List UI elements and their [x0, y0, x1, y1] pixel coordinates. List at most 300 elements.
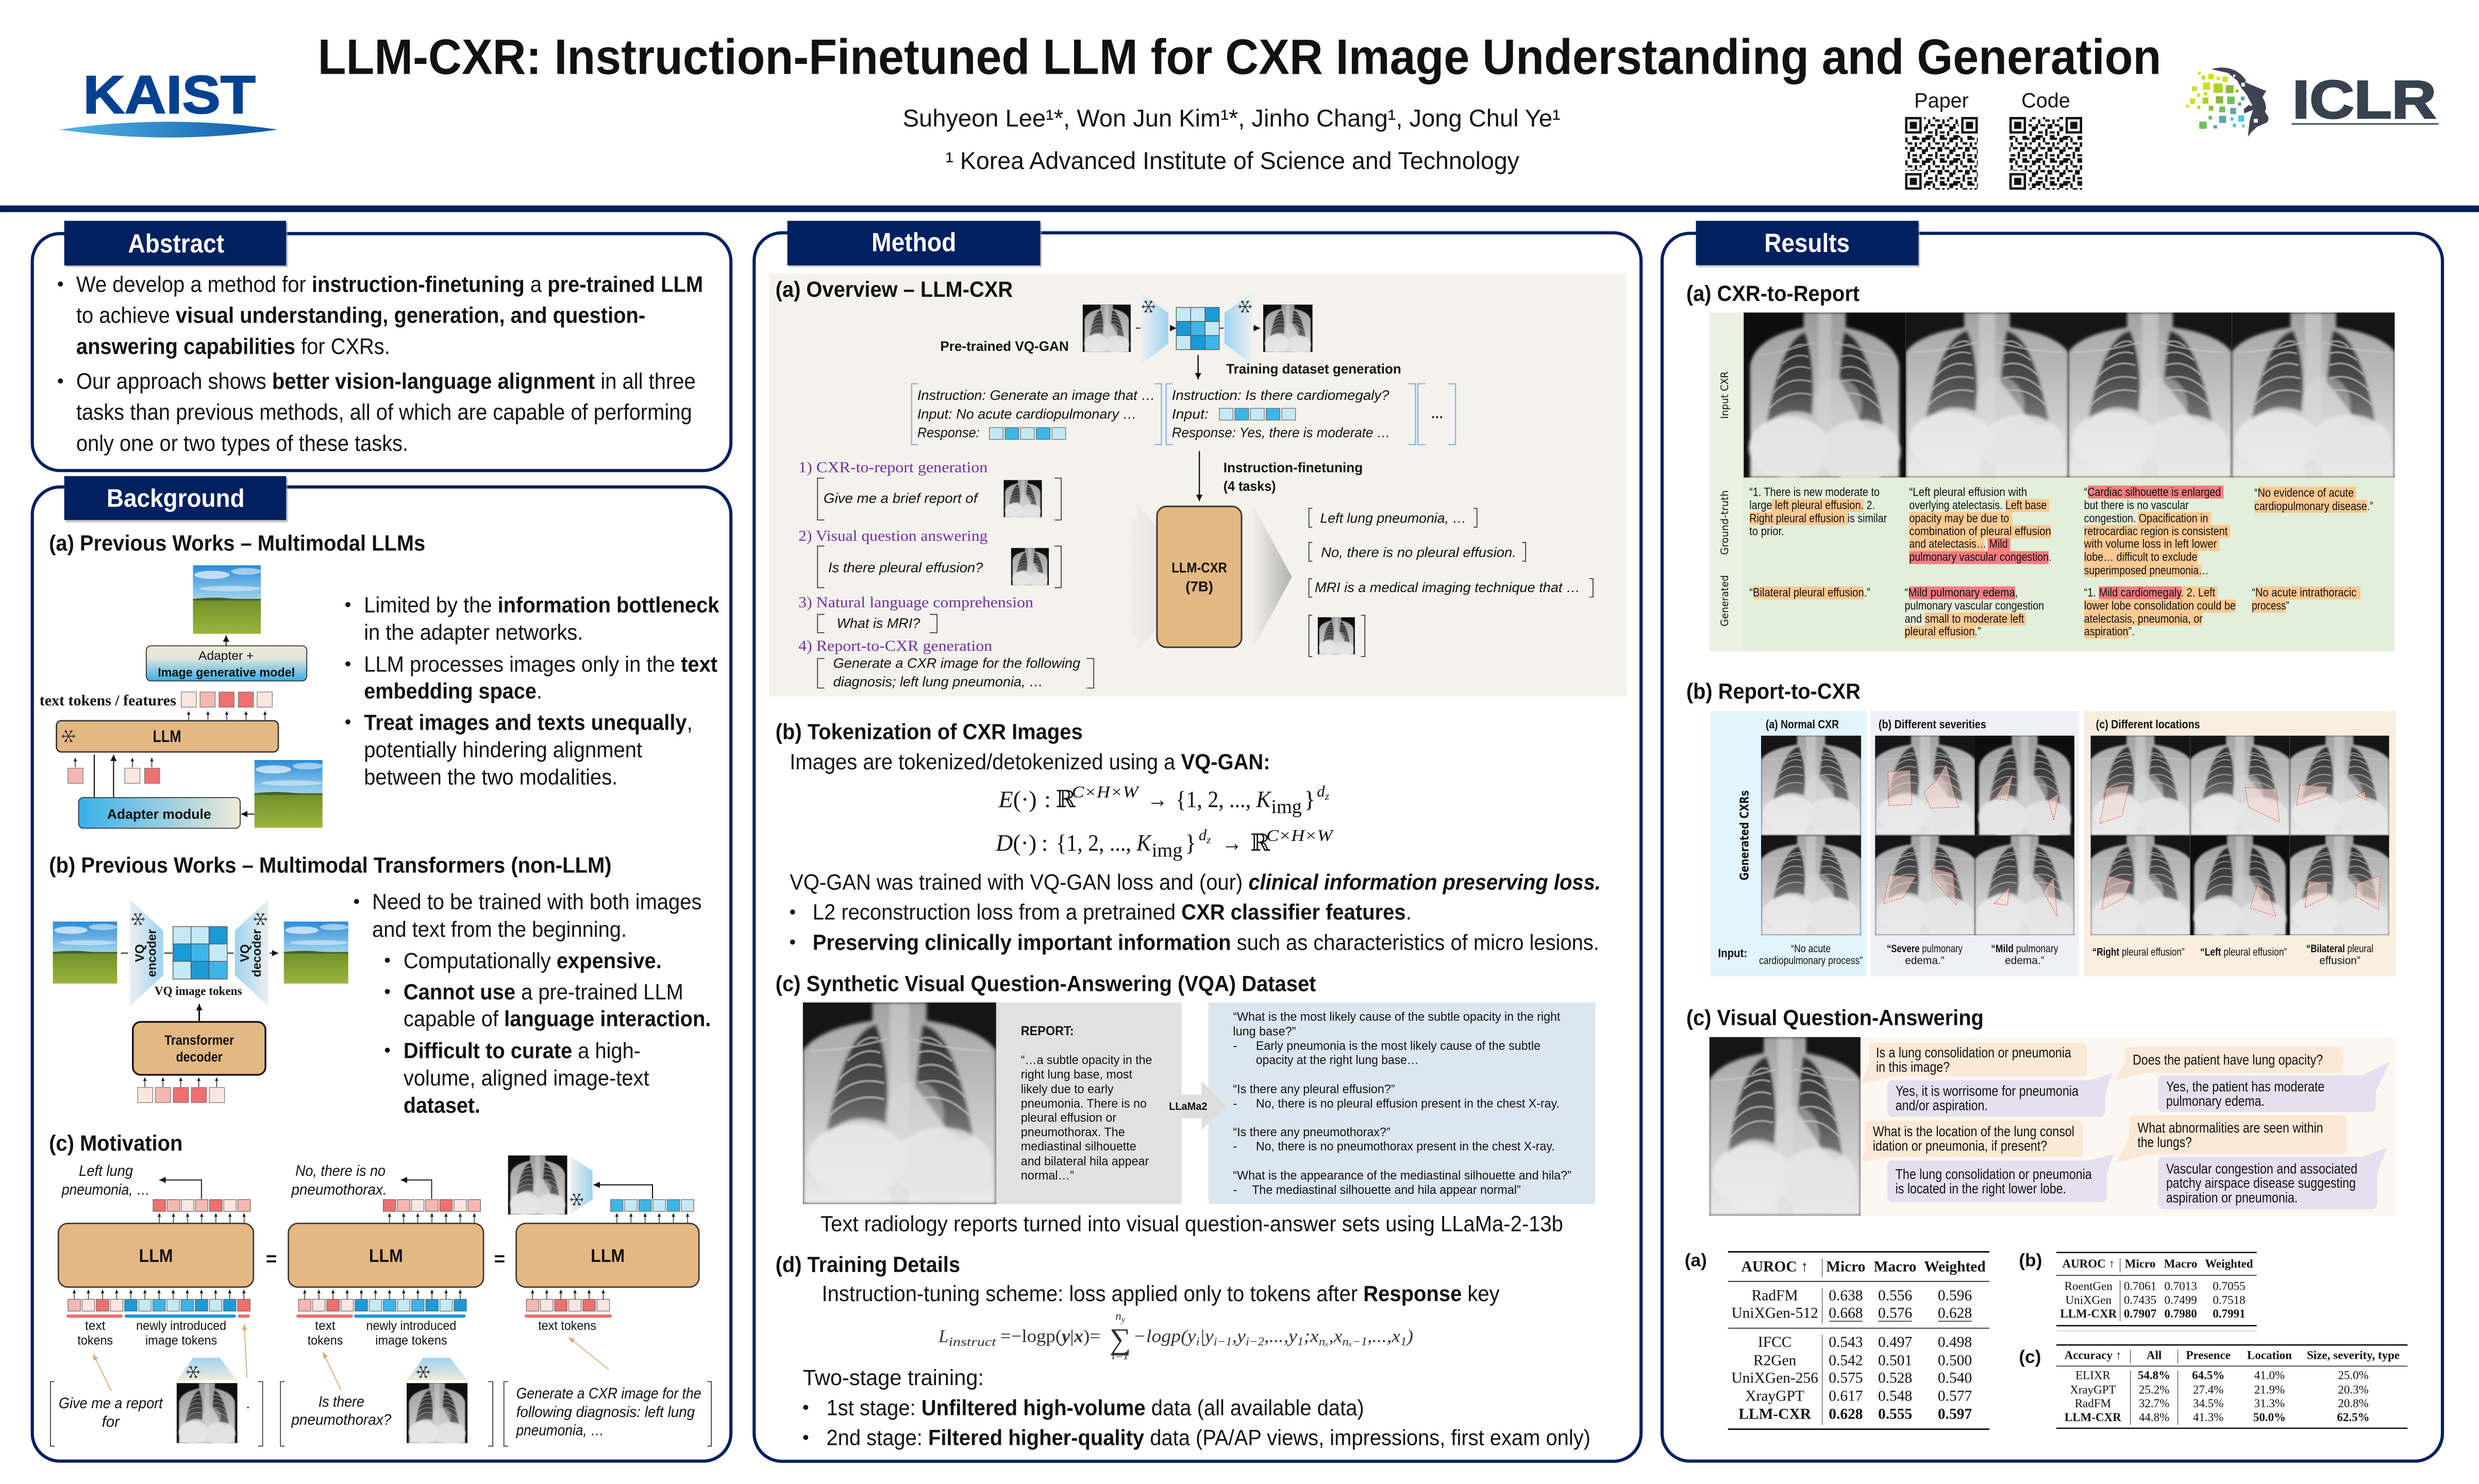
diagram: motivation column 2 [280, 1162, 493, 1446]
table c: 27.4% [2193, 1383, 2223, 1396]
affiliation: ¹ Korea Advanced Institute of Science and Technology [945, 147, 1519, 174]
token grid [1176, 308, 1219, 350]
equation: loss: ,x [1329, 1326, 1343, 1346]
answer 2 [1887, 1154, 2114, 1202]
table a [1685, 1250, 1989, 1429]
equation: loss: −logp( y [1133, 1326, 1195, 1346]
abstract text: only one or two types of these tasks. [76, 431, 408, 456]
equals: = [494, 1249, 505, 1270]
prompt: Give me a report [59, 1395, 163, 1412]
generated reports: “Mild pulmonary edema, [1905, 585, 2018, 599]
table b: Macro [2164, 1257, 2197, 1270]
label: instruction-finetuning [1224, 460, 1363, 494]
table c [2019, 1345, 2407, 1428]
bullets: transformers: Computationally expensive. [404, 949, 662, 973]
task 4: Generate a CXR image for the following [833, 655, 1080, 671]
token labels: tokens [77, 1334, 113, 1348]
adapter plus generative model: Adapter + [198, 649, 254, 663]
ground truth reports: Right pleural effusion is similar [1749, 512, 1887, 525]
table a: AUROC ↑ [1741, 1259, 1808, 1275]
input tokens [298, 1299, 466, 1311]
dataset sample 2 [1166, 384, 1415, 445]
token labels: image tokens [375, 1334, 447, 1348]
VQ encoder: encoder [145, 929, 159, 977]
LLM bar [57, 721, 278, 752]
equation: loss: i−2 [1246, 1335, 1264, 1348]
output text [61, 1162, 150, 1198]
dataset sample 1: Instruction: Generate an image that … [917, 387, 1155, 403]
panel: different severities: (b) Different severities [1879, 718, 1986, 731]
table b: 0.7435 [2124, 1294, 2156, 1307]
answer 3: pulmonary edema. [2166, 1093, 2265, 1109]
ground truth reports: to prior. [1749, 525, 1784, 538]
label: instruction-finetuning: Instruction-finetuning [1224, 460, 1363, 476]
heading: overview: (a) Overview – LLM-CXR [776, 277, 1013, 302]
QA box: “Is there any pneumothorax?” [1233, 1125, 1391, 1139]
text: VQ-GAN: Images are tokenized/detokenized using a VQ-GAN: [790, 750, 1270, 774]
bullets: transformers: dataset. [404, 1093, 480, 1118]
panel: results [1662, 221, 2442, 1461]
heading: results [1696, 221, 1920, 267]
equation: loss: =−logp( y|x)= [1000, 1326, 1100, 1346]
input tokens [138, 1087, 225, 1103]
equation: loss: ,...,x [1367, 1326, 1400, 1346]
table c: 21.9% [2254, 1383, 2285, 1396]
table a: 0.576 [1878, 1305, 1912, 1321]
QA box: Early pneumonia is the most likely cause of the subtle [1256, 1039, 1540, 1053]
text: two-stage training [803, 1365, 1590, 1451]
task 1: Give me a brief report of [824, 491, 979, 506]
equation: loss [938, 1309, 1413, 1362]
table a: 0.542 [1829, 1352, 1863, 1369]
equation: decoder: D(·) [995, 830, 1036, 856]
equation: encoder: d [1317, 783, 1325, 800]
task 4 [798, 638, 1094, 689]
heading: method: Method [872, 227, 956, 257]
ground truth reports: large left pleural effusion. 2. [1749, 498, 1875, 512]
logo: ICLR: ICLR [2292, 70, 2436, 130]
question 1: in this image? [1876, 1059, 1950, 1075]
table b: AUROC ↑ [2062, 1257, 2115, 1270]
token labels: image tokens [145, 1334, 217, 1348]
prompt [280, 1358, 493, 1446]
report box: pneumonia. There is no [1021, 1097, 1147, 1110]
table c: 20.8% [2338, 1397, 2369, 1410]
table b: UniXGen [2066, 1294, 2112, 1307]
equation: encoder: z [1325, 790, 1330, 802]
output 2: No, there is no pleural effusion. [1321, 545, 1516, 560]
ground truth reports: overlying atelectasis. Left base [1909, 498, 2047, 512]
bullets: transformers: Cannot use a pre-trained LLM [404, 980, 683, 1005]
table a: (a) [1685, 1250, 1707, 1270]
prompt: Generate a CXR image for the [516, 1385, 701, 1402]
panel: normal CXR: Input: [1718, 947, 1747, 960]
question 4: What abnormalities are seen within [2137, 1120, 2323, 1136]
panel: different severities: “Severe pulmonary [1887, 943, 1963, 955]
panel: different locations: “Bilateral pleural [2306, 943, 2373, 955]
VQ token grid [173, 926, 227, 979]
figure: CXR-to-report [1710, 312, 2394, 651]
question 4 [2116, 1115, 2347, 1162]
adapter module [79, 798, 240, 828]
bullets: transformers: capable of language interaction. [404, 1007, 711, 1032]
answer 1 [1887, 1073, 2112, 1117]
QA box: lung base?” [1233, 1025, 1296, 1039]
prompt: Is there [319, 1393, 364, 1410]
panel: method [754, 221, 1641, 1461]
table a: 0.596 [1938, 1287, 1972, 1304]
table a: UniXGen-512 [1731, 1305, 1818, 1321]
ground truth reports: superimposed pneumonia… [2084, 563, 2208, 577]
token labels: newly introduced [136, 1319, 226, 1333]
LLM box [516, 1223, 699, 1287]
heading: previous works transformers: (b) Previous Works – Multimodal Transformers (non-LLM) [49, 853, 612, 878]
equation: decoder: d [1199, 826, 1207, 844]
VQ decoder [235, 899, 269, 1006]
text: VQ-GAN details: L2 reconstruction loss from a pretrained CXR classifier features. [813, 900, 1412, 925]
generated reports: lower lobe consolidation could be [2084, 599, 2236, 612]
QA box: - [1233, 1039, 1237, 1053]
answer 1: and/or aspiration. [1896, 1098, 1988, 1114]
ground truth reports: combination of pleural effusion [1909, 525, 2051, 538]
abstract text: to achieve visual understanding, generation, and question- [76, 303, 645, 328]
text: VQ-GAN details: VQ-GAN was trained with VQ-GAN loss and (our) clinical information preserving loss. [790, 870, 1601, 895]
table b: 0.7907 [2124, 1307, 2156, 1320]
report box: and bilateral hila appear [1021, 1154, 1149, 1168]
answer 2: The lung consolidation or pneumonia [1896, 1166, 2092, 1182]
equation: loss: |y [1199, 1326, 1214, 1346]
label: VQ image tokens: VQ image tokens [155, 984, 242, 998]
generated reports: “Bilateral pleural effusion.” [1749, 585, 1870, 599]
dataset sample 2: Input: [1172, 406, 1209, 421]
QA box: No, there is no pleural effusion present in the chest X-ray. [1256, 1097, 1560, 1110]
abstract text: We develop a method for instruction-finetuning a pre-trained LLM [76, 272, 703, 297]
QA box: No, there is no pneumothorax present in the chest X-ray. [1256, 1140, 1555, 1154]
bullets: transformers: volume, aligned image-text [404, 1066, 649, 1090]
QR code: paper [1905, 89, 1978, 190]
ground truth reports: and atelectasis… Mild [1909, 537, 2008, 550]
generated reports: atelectasis, pneumonia, or [2084, 612, 2203, 625]
prompt: pneumonia, … [516, 1422, 604, 1439]
table a: 0.638 [1829, 1287, 1863, 1304]
table b: Micro [2125, 1257, 2155, 1270]
generated reports: process” [2252, 599, 2289, 612]
report box: REPORT: [1021, 1024, 1074, 1038]
equation: loss: nₓ [1319, 1335, 1329, 1348]
generated reports: and small to moderate left [1905, 612, 2024, 625]
table a: 0.668 [1829, 1305, 1863, 1321]
VQ encoder [130, 899, 163, 1006]
answer 2: is located in the right lower lobe. [1896, 1181, 2066, 1196]
text: instruction tuning: Instruction-tuning scheme: loss applied only to tokens after Response key [822, 1281, 1500, 1306]
heading: CXR-to-report: (a) CXR-to-Report [1686, 281, 1860, 306]
dataset sample 3: … [1431, 407, 1444, 421]
table c: All [2147, 1348, 2162, 1361]
table a: 0.540 [1938, 1370, 1972, 1386]
panel: different severities [1871, 711, 2079, 976]
heading: motivation: (c) Motivation [49, 1131, 182, 1156]
input tokens [526, 1299, 610, 1311]
abstract text: tasks than previous methods, all of which are capable of performing [76, 400, 692, 425]
dataset sample 1 [912, 384, 1161, 445]
panel: normal CXR: “No acute [1791, 943, 1831, 955]
equation: encoder: C×H×W [1072, 783, 1140, 801]
table a: 0.498 [1938, 1334, 1972, 1351]
report box: “…a subtle opacity in the [1021, 1053, 1152, 1067]
task 4: diagnosis; left lung pneumonia, … [833, 674, 1043, 689]
table c: 44.8% [2139, 1411, 2169, 1424]
equation: encoder: {1, 2, ..., K [1176, 786, 1272, 813]
row labels: Input CXR [1719, 372, 1731, 419]
QA box: “What is the most likely cause of the subtle opacity in the right [1233, 1010, 1561, 1024]
QA box: “What is the appearance of the mediastinal silhouette and hila?” [1233, 1169, 1571, 1183]
box: LLM-CXR: (7B) [1185, 578, 1213, 594]
report box: pleural effusion or [1021, 1111, 1116, 1125]
table c: LLM-CXR [2065, 1411, 2121, 1424]
output tokens [153, 1200, 250, 1211]
prompt: following diagnosis: left lung [516, 1404, 695, 1421]
panel: different locations: (c) Different locations [2096, 718, 2200, 731]
panel: different locations: “Right pleural effusion” [2092, 946, 2185, 958]
QA box: - [1233, 1183, 1237, 1197]
transformer decoder [133, 1022, 265, 1075]
panel: different locations [2084, 711, 2397, 976]
equation: loss: i=1 [1112, 1349, 1129, 1362]
heading: results: Results [1764, 228, 1850, 258]
transformer decoder: Transformer [164, 1033, 234, 1048]
table a: R2Gen [1753, 1352, 1797, 1369]
ground truth reports [1749, 485, 2373, 577]
ground truth reports: cardiopulmonary disease.” [2254, 499, 2373, 513]
heading: abstract: Abstract [128, 229, 224, 258]
dataset sample 1: Response: [917, 425, 980, 440]
LLM box [58, 1223, 254, 1287]
bullets: previous LLMs: Treat images and texts unequally, [364, 710, 693, 735]
panel: different severities: edema.” [1905, 955, 1945, 967]
decoder [1225, 293, 1252, 364]
equation: encoder: img [1271, 796, 1302, 818]
table b: 0.7980 [2164, 1307, 2197, 1320]
answer 4: aspiration or pneumonia. [2166, 1189, 2298, 1205]
panel: normal CXR: Generated CXRs [1738, 790, 1752, 881]
heading: synthetic VQA: (c) Synthetic Visual Question-Answering (VQA) Dataset [776, 971, 1316, 996]
bullets: transformers: Need to be trained with both images [372, 890, 701, 915]
question 2: idation or pneumonia, if present? [1873, 1138, 2047, 1154]
panel: normal CXR: (a) Normal CXR [1766, 718, 1839, 731]
report box: likely due to early [1021, 1082, 1114, 1096]
QA box: The mediastinal silhouette and hila appear normal” [1252, 1183, 1521, 1197]
table c: 32.7% [2139, 1397, 2169, 1410]
image: output field [193, 565, 261, 634]
dataset sample 1: Input: No acute cardiopulmonary … [917, 406, 1137, 421]
table a: 0.597 [1938, 1406, 1972, 1422]
table a: 0.500 [1938, 1352, 1972, 1369]
equation: encoder: } [1304, 786, 1315, 813]
table c: ELIXR [2075, 1369, 2110, 1382]
table a: 0.548 [1878, 1388, 1912, 1404]
heading: method [788, 221, 1042, 267]
table b [2019, 1250, 2257, 1331]
table b: Weighted [2205, 1257, 2253, 1270]
figure: VQA [1710, 1037, 2397, 1216]
label: text tokens: text tokens / features [40, 693, 176, 709]
adapter plus generative model [146, 646, 307, 681]
ground truth reports: but there is no vascular [2084, 498, 2189, 512]
equation: loss: ,y [1232, 1326, 1246, 1346]
image: VQA CXR [1710, 1037, 1861, 1216]
title: LLM-CXR: Instruction-Finetuned LLM for CXR Image Understanding and Generation [318, 30, 2161, 85]
task 4: 4) Report-to-CXR generation [798, 638, 993, 654]
logo: KAIST: KAIST [83, 65, 256, 125]
panel: different severities: “Mild pulmonary [1991, 943, 2058, 955]
row labels: Generated [1719, 575, 1731, 627]
output text [291, 1162, 387, 1198]
task 1: 1) CXR-to-report generation [798, 460, 988, 476]
bullets: previous LLMs: between the two modalities. [364, 765, 617, 789]
table c: 64.5% [2192, 1369, 2224, 1382]
equation: loss: 1 [1297, 1335, 1303, 1348]
equation: loss: nₓ−1 [1343, 1335, 1367, 1348]
table c: Accuracy ↑ [2065, 1348, 2121, 1361]
table a: Micro [1826, 1259, 1866, 1275]
logo: ICLR [2186, 68, 2439, 137]
bullets: transformers [354, 890, 711, 1118]
table a: 0.628 [1938, 1305, 1972, 1321]
table c: 62.5% [2337, 1411, 2370, 1424]
image: field out [284, 921, 348, 984]
box: LLM-CXR: LLM-CXR [1171, 560, 1227, 576]
QR code: paper: Paper [1914, 89, 1969, 112]
equation: encoder: → [1147, 786, 1168, 813]
table a: 0.577 [1938, 1388, 1972, 1404]
text: two-stage training: 1st stage: Unfiltered high-volume data (all available data) [826, 1395, 1364, 1420]
equation: decoder: → [1221, 830, 1242, 856]
table a: IFCC [1758, 1334, 1791, 1351]
task 2: Is there pleural effusion? [828, 560, 983, 575]
table c: 25.2% [2139, 1383, 2169, 1396]
output tokens [611, 1200, 694, 1211]
table c: XrayGPT [2070, 1383, 2116, 1396]
equation: encoder: E(·) [998, 786, 1037, 813]
QA box [1209, 1002, 1595, 1204]
token labels: tokens [308, 1334, 343, 1348]
panel: normal CXR [1711, 711, 1866, 976]
panel: different locations: “Left pleural effusion” [2200, 946, 2287, 958]
question 3 [2114, 1047, 2343, 1081]
ground truth reports: with volume loss in left lower [2084, 537, 2217, 550]
text: VQ-GAN details: Preserving clinically important information such as characteristics of micro lesions. [813, 930, 1599, 955]
row labels [1719, 372, 1731, 627]
QR code: code [2009, 89, 2082, 190]
image: field in [53, 921, 117, 984]
output 4 [1309, 615, 1365, 656]
output text: Left lung [79, 1162, 133, 1179]
token labels [77, 1319, 226, 1348]
generated reports [1749, 585, 2356, 638]
image: CXR in [1083, 305, 1131, 353]
table c: 41.3% [2193, 1411, 2223, 1424]
QA box: - [1233, 1097, 1237, 1110]
output 3: MRI is a medical imaging technique that … [1315, 580, 1580, 595]
question 4: the lungs? [2137, 1134, 2192, 1150]
equation: loss: instruct [949, 1335, 997, 1349]
table c: RadFM [2075, 1397, 2111, 1410]
equation: decoder: : [1042, 830, 1048, 856]
abstract text: answering capabilities for CXRs. [76, 334, 390, 359]
equation: loss: ;x [1303, 1326, 1319, 1346]
input tokens [68, 768, 160, 783]
dataset sample 3 [1418, 384, 1455, 445]
encoder [1142, 293, 1168, 364]
LLM box: LLM [139, 1246, 173, 1266]
LLM bar: LLM [153, 727, 181, 746]
LLM box: LLM [369, 1246, 403, 1266]
table c: 34.5% [2193, 1397, 2223, 1410]
table a: Weighted [1924, 1259, 1986, 1275]
equation: loss: ,...,y [1264, 1326, 1297, 1346]
QA box: - [1233, 1140, 1237, 1154]
table c: 20.3% [2338, 1383, 2369, 1396]
table c: 25.0% [2338, 1369, 2369, 1382]
equation: decoder: z [1206, 834, 1211, 846]
prompt [504, 1381, 711, 1446]
task 2: 2) Visual question answering [798, 528, 988, 545]
answer 4: patchy airspace disease suggesting [2166, 1175, 2356, 1191]
token label: text tokens [538, 1319, 596, 1333]
report box: mediastinal silhouette [1021, 1140, 1136, 1154]
image: generated CXR [508, 1155, 567, 1217]
diagram: motivation column 3 [504, 1155, 711, 1446]
header rule [0, 206, 2479, 212]
equation: loss: L [938, 1326, 949, 1346]
output text: pneumonia, … [61, 1181, 150, 1198]
panel: normal CXR: cardiopulmonary process” [1759, 955, 1863, 967]
task 1 [798, 460, 1061, 520]
question 2: What is the location of the lung consol [1873, 1123, 2074, 1139]
bullets: previous LLMs: Limited by the information bottleneck [364, 593, 719, 618]
diagram: multimodal LLM [40, 565, 323, 828]
table a: 0.575 [1829, 1370, 1863, 1386]
input tokens [68, 1299, 250, 1311]
prompt: . [246, 1395, 250, 1411]
table c: Location [2247, 1348, 2292, 1361]
ground truth reports: “Cardiac silhouette is enlarged [2084, 485, 2221, 498]
arrow: into LLM-CXR [1130, 504, 1201, 651]
VQ encoder: VQ [133, 944, 147, 962]
figure: VQA dataset [803, 1002, 1595, 1204]
table b: 0.7991 [2213, 1307, 2246, 1320]
heading: background [64, 476, 288, 522]
ground truth reports: “No evidence of acute [2254, 486, 2354, 499]
authors: Suhyeon Lee¹*, Won Jun Kim¹*, Jinho Chang¹, Jong Chul Ye¹ [903, 105, 1561, 131]
report box: right lung base, most [1021, 1068, 1132, 1082]
table a: 0.555 [1878, 1406, 1912, 1422]
heading: abstract [64, 221, 288, 267]
table c: Presence [2186, 1348, 2231, 1361]
QR code: code: Code [2021, 89, 2070, 112]
label: dataset generation: Training dataset generation [1226, 361, 1401, 377]
bullets: previous LLMs: in the adapter networks. [364, 620, 583, 645]
answer 3 [2158, 1061, 2390, 1112]
QA box: opacity at the right lung base… [1256, 1053, 1419, 1067]
images: input CXRs [1744, 312, 2394, 482]
table b: (b) [2019, 1250, 2042, 1270]
dataset sample 2: Instruction: Is there cardiomegaly? [1172, 387, 1389, 403]
table c: 31.3% [2254, 1397, 2285, 1410]
table b: LLM-CXR [2060, 1307, 2117, 1320]
table a: 0.543 [1829, 1334, 1863, 1351]
transformer decoder: decoder [176, 1049, 223, 1065]
